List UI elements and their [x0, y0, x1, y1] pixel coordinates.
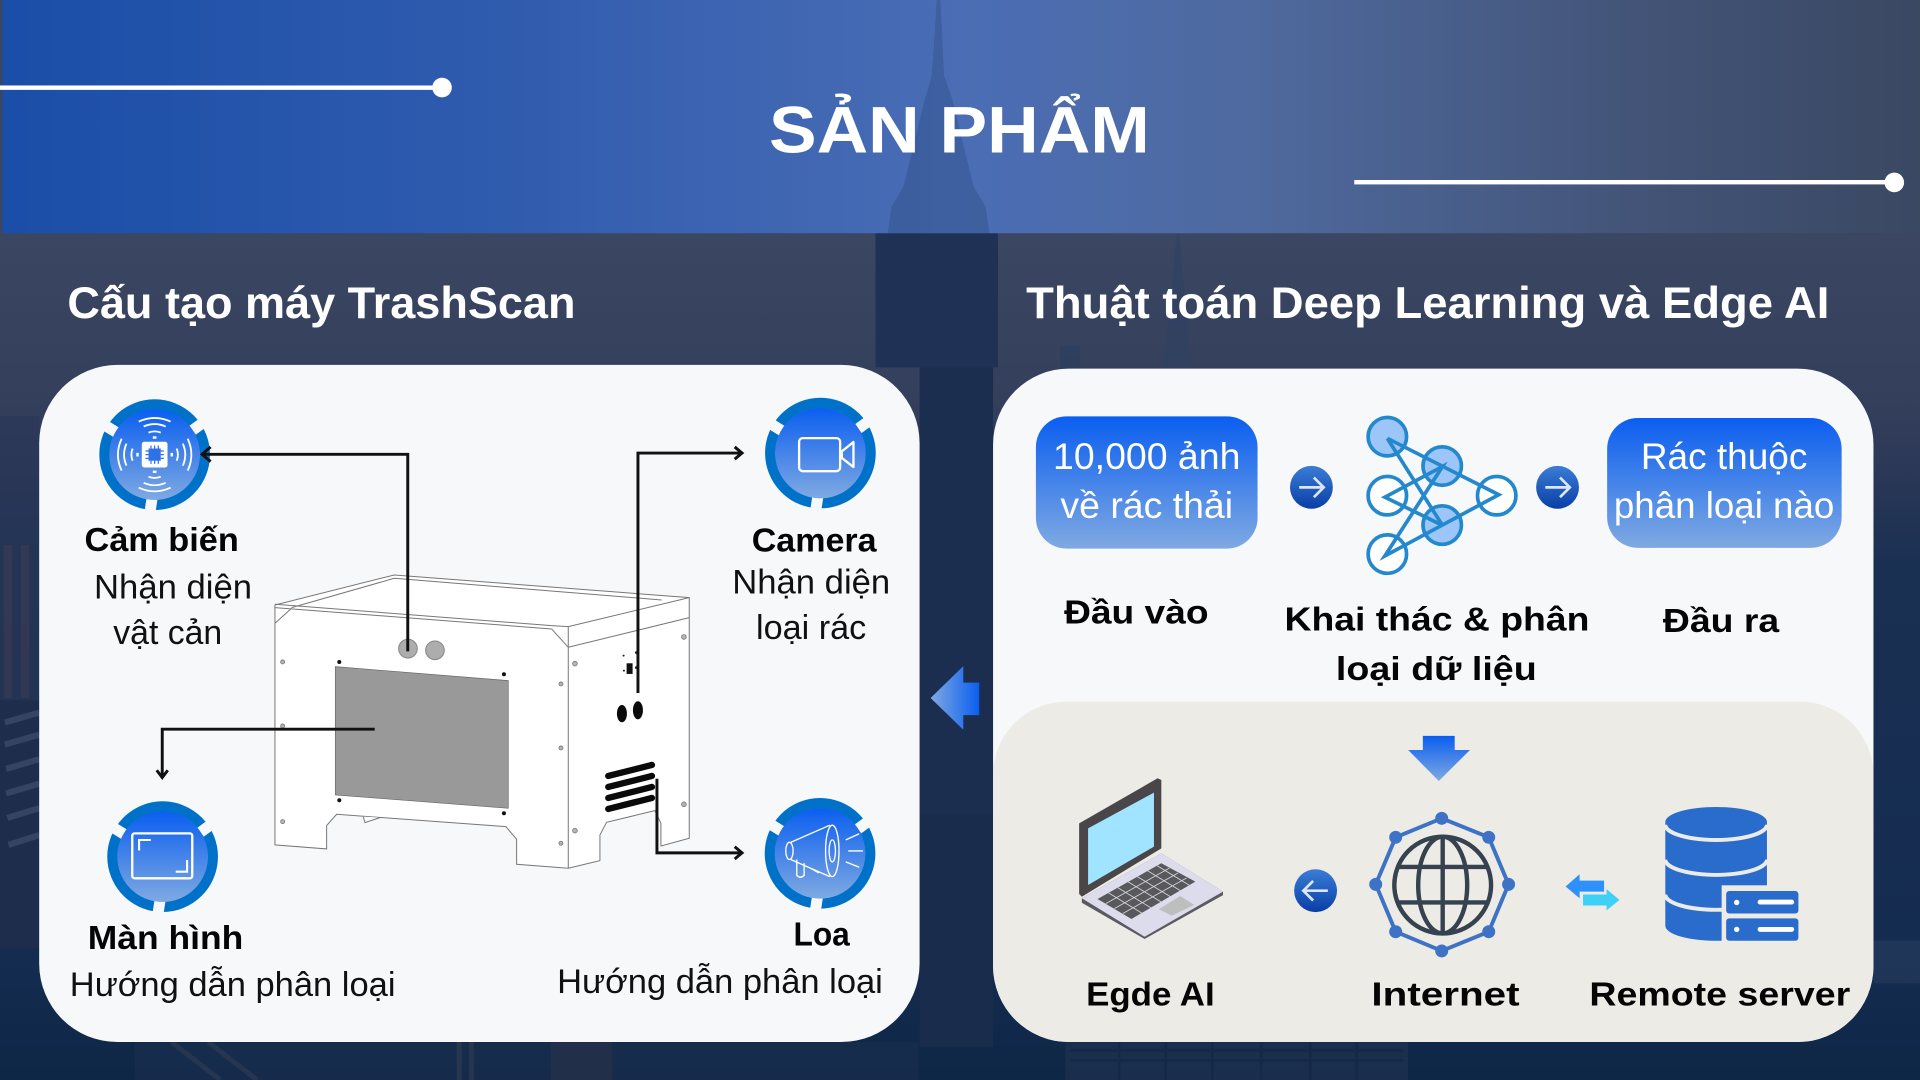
label: remote server: Remote server: [1589, 976, 1850, 1013]
label: output: Đầu ra: [1663, 603, 1779, 640]
arrow: network to output: [1536, 466, 1579, 509]
arrow: down: [1408, 736, 1470, 781]
description: camera: Nhận diện: [732, 563, 890, 601]
description: sensor: [94, 568, 252, 652]
description: screen: Hướng dẫn phân loại: [70, 965, 396, 1004]
icon: camera: [767, 403, 872, 512]
panel: edge section background: [993, 702, 1873, 1042]
connector: speaker: [657, 779, 742, 859]
icon: globe network: [1369, 812, 1515, 957]
label: mining and classification: [1284, 602, 1589, 688]
machine illustration: [275, 575, 689, 868]
label: mining and classification: Khai thác & phân: [1284, 602, 1589, 639]
header band: [2, 0, 1920, 233]
description: camera: loại rác: [756, 609, 866, 647]
connector: camera: [638, 447, 742, 693]
label: screen: Màn hình: [88, 920, 243, 957]
input box: 10,000 ảnh: [1053, 436, 1240, 477]
label: mining and classification: loại dữ liệu: [1336, 651, 1537, 688]
icon: sensor: [101, 404, 206, 513]
input box: [1036, 416, 1258, 549]
arrow: internet to edge AI: [1294, 869, 1337, 912]
label: internet: Internet: [1371, 976, 1520, 1013]
input box: về rác thải: [1060, 485, 1233, 526]
icon: laptop: [1079, 778, 1223, 939]
heading: algorithm: Thuật toán Deep Learning và Edge AI: [1026, 279, 1829, 328]
panel: algorithm: [993, 369, 1873, 1042]
output box: Rác thuộc: [1641, 436, 1807, 477]
connector: sensor: [202, 447, 408, 651]
arrow: between panels: [931, 666, 979, 730]
icon: speaker: [766, 803, 871, 912]
label: speaker: Loa: [793, 916, 850, 953]
arrow: input to network: [1290, 466, 1333, 509]
panel: machine structure: [39, 365, 920, 1042]
connector: screen: [157, 729, 375, 778]
description: sensor: vật cản: [113, 614, 222, 652]
icon: neural network: [1368, 417, 1516, 573]
label: input: Đầu vào: [1064, 594, 1209, 631]
icon: database server: [1665, 807, 1802, 945]
description: speaker: Hướng dẫn phân loại: [557, 962, 883, 1001]
label: camera: Camera: [752, 523, 877, 560]
title: SẢN PHẨM: [769, 92, 1150, 167]
decorative line: header right: [1354, 173, 1904, 192]
label: edge AI: Egde AI: [1086, 976, 1215, 1013]
description: camera: [732, 563, 890, 647]
heading: machine structure: Cấu tạo máy TrashScan: [67, 279, 576, 328]
output box: phân loại nào: [1614, 485, 1834, 526]
output box: [1607, 418, 1842, 548]
description: sensor: Nhận diện: [94, 568, 252, 606]
icon: screen: [109, 806, 214, 915]
icon: two-way arrows: [1566, 874, 1620, 912]
decorative line: header left: [0, 78, 452, 97]
label: sensor: Cảm biến: [84, 522, 239, 559]
